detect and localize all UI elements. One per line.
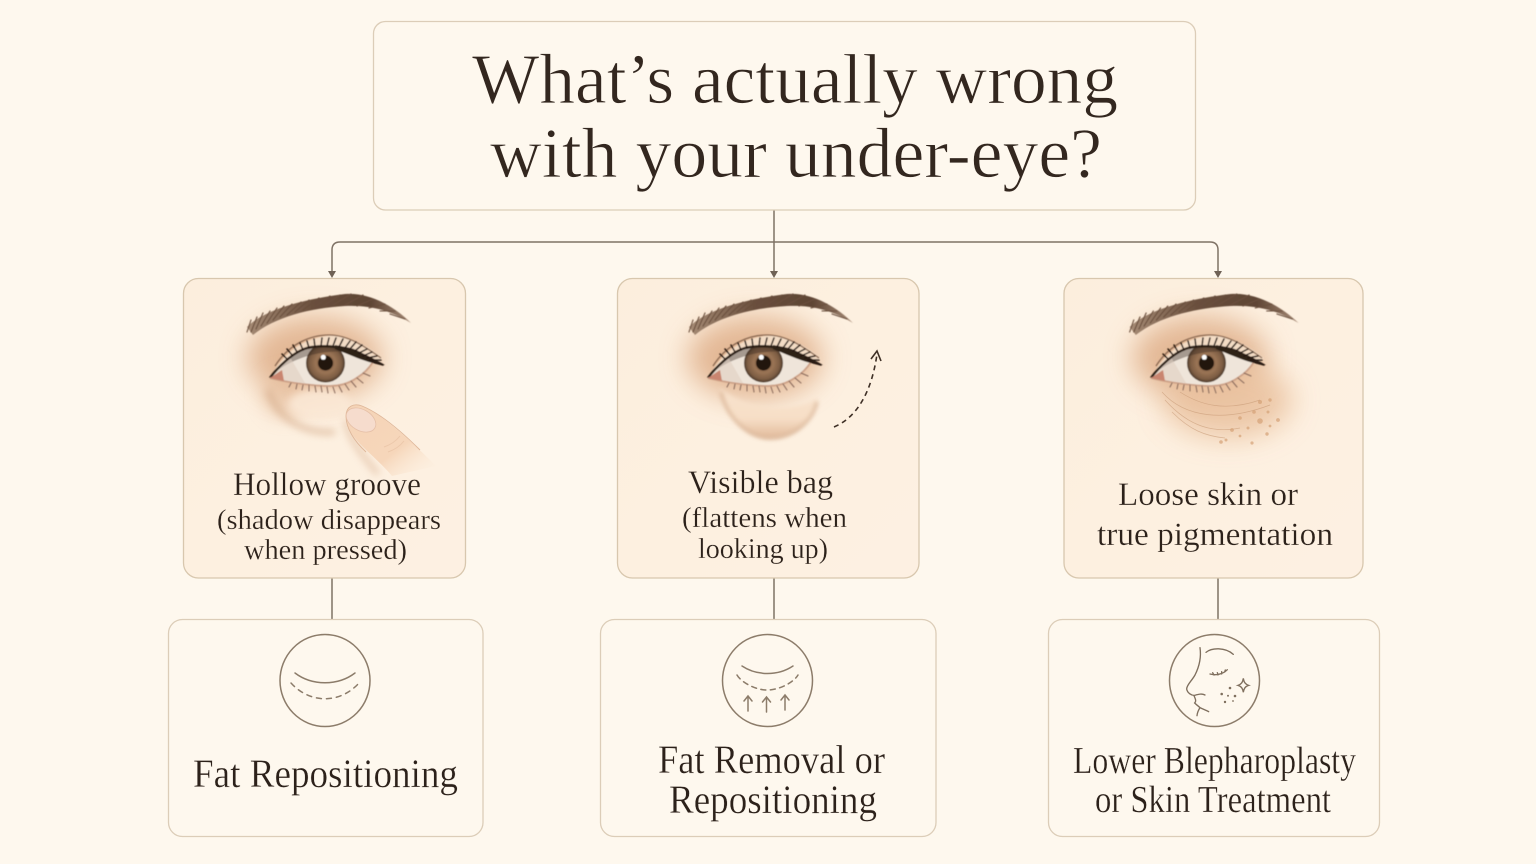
icon: under-eye curve with dashed line: [280, 634, 370, 726]
label: loose skin or true pigmentation: true pigmentation: [1097, 517, 1333, 553]
label: lower blepharoplasty or skin treatment: [1073, 740, 1356, 821]
panel: loose skin or pigmentation: [1064, 278, 1363, 578]
panel: visible bag: [618, 278, 919, 578]
label: fat removal or repositioning: Fat Removal or: [658, 737, 885, 782]
label: loose skin or true pigmentation: [1097, 477, 1333, 553]
illustration: eye with finger pressing hollow groove: [247, 294, 436, 476]
card: lower blepharoplasty or skin treatment: [1048, 620, 1380, 836]
card: fat repositioning: [168, 620, 483, 836]
connector: title to branches: [328, 210, 1222, 619]
label: lower blepharoplasty or skin treatment: or Skin Treatment: [1095, 779, 1331, 821]
icon: face profile with freckles and sparkle: [1170, 634, 1260, 726]
title: with your under-eye?: [490, 115, 1102, 193]
label: lower blepharoplasty or skin treatment: Lower Blepharoplasty: [1073, 740, 1356, 782]
label: fat removal or repositioning: Repositioning: [669, 777, 877, 822]
panel: hollow groove: [184, 278, 466, 578]
label: hollow groove: (shadow disappears: [217, 504, 441, 536]
label: hollow groove: when pressed): [244, 534, 407, 566]
arrow: dashed upward curve: [834, 351, 881, 427]
title: [374, 22, 1196, 210]
illustration: eye with under-eye bag: [687, 294, 853, 438]
icon: curve with dashed line and up arrows: [722, 634, 812, 726]
label: fat removal or repositioning: [658, 737, 885, 822]
label: hollow groove: Hollow groove: [233, 467, 421, 503]
label: fat repositioning: Fat Repositioning: [193, 751, 458, 796]
label: visible bag: (flattens when: [682, 502, 847, 534]
illustration: eye with wrinkles and pigmentation: [1130, 294, 1299, 445]
label: visible bag: [682, 465, 847, 565]
label: visible bag: Visible bag: [688, 465, 833, 501]
title: What’s actually wrong: [472, 41, 1118, 119]
label: hollow groove: [217, 467, 441, 566]
label: loose skin or true pigmentation: Loose skin or: [1118, 477, 1298, 513]
label: visible bag: looking up): [698, 533, 828, 565]
card: fat removal or repositioning: [600, 620, 936, 836]
